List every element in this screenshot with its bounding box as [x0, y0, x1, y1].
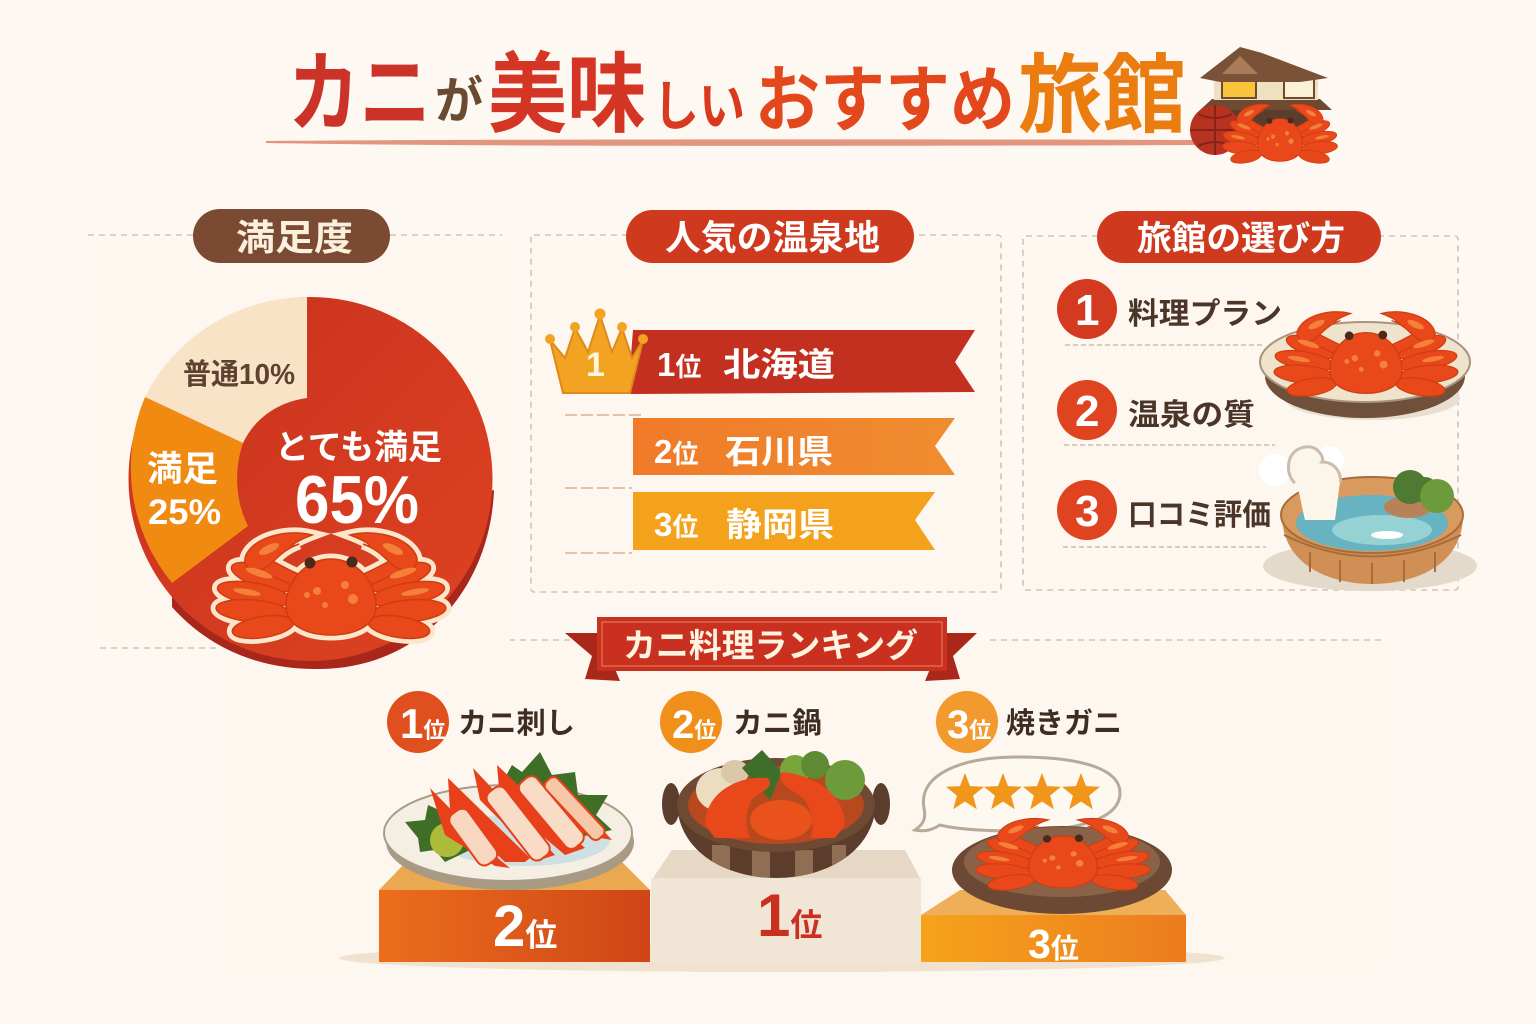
- ribbon: rank 1: 1位: [657, 346, 701, 383]
- icon: grilled crab plate: [952, 819, 1172, 914]
- heading: ranking banner: [565, 617, 977, 681]
- ribbon: rank 3: 3位: [654, 506, 698, 543]
- dish label 1: kani sashimi: カニ刺し: [458, 707, 575, 740]
- panel: satisfaction: [88, 209, 510, 669]
- dish label 2: kani nabe: カニ鍋: [733, 707, 822, 740]
- ribbon: rank 2: 2位: [654, 433, 698, 470]
- podium: first place block: 1位: [757, 882, 822, 949]
- ribbon: rank 2: [633, 418, 955, 475]
- panel: crab dish ranking: [339, 617, 1381, 972]
- label: very satisfied 65%: [275, 429, 442, 538]
- icon: crown: 1: [586, 346, 605, 384]
- ribbon: rank 3: 静岡県: [726, 506, 834, 543]
- dish label 3: grilled crab: 3位: [947, 703, 991, 747]
- heading: ranking banner: カニ料理ランキング: [623, 627, 918, 664]
- item 2: onsen quality: 温泉の質: [1128, 399, 1255, 432]
- dish label 2: kani nabe: 2位: [672, 703, 716, 747]
- icon: sashimi plate: [384, 752, 634, 890]
- label: very satisfied 65%: 65%: [295, 462, 419, 538]
- dish label 3: grilled crab: [936, 691, 1122, 753]
- callout: star rating bubble: [915, 757, 1120, 831]
- dish label 2: kani nabe: [660, 691, 822, 753]
- label: satisfied 25%: 25%: [148, 493, 221, 532]
- ribbon: rank 1: [628, 330, 975, 394]
- title: 美味: [488, 45, 646, 144]
- item 3: reviews: [1057, 480, 1271, 540]
- label: very satisfied 65%: とても満足: [275, 429, 442, 467]
- icon: red ball: [1190, 105, 1240, 155]
- podium base shadow: [339, 944, 1225, 972]
- title: [288, 44, 1186, 144]
- icon: crab on pie: [215, 533, 447, 642]
- pot vegetables: [696, 750, 865, 812]
- title underline: [266, 139, 1205, 146]
- dish label 3: grilled crab: 焼きガニ: [1006, 707, 1122, 740]
- pie chart: [128, 297, 494, 669]
- ribbon: rank 2: 石川県: [725, 433, 833, 470]
- item 3: reviews: 口コミ評価: [1128, 499, 1271, 532]
- icon: rocks and shrub: [1384, 470, 1454, 518]
- item 1: cuisine plan: 1: [1075, 286, 1099, 335]
- podium: third place block: 3位: [1028, 921, 1079, 967]
- title: しい: [653, 77, 745, 137]
- stars: [946, 773, 1100, 809]
- ribbon: rank 1: 北海道: [723, 346, 835, 383]
- item 1: cuisine plan: 料理プラン: [1128, 298, 1282, 331]
- title: 旅館: [1018, 48, 1186, 144]
- icon: hot spring tub: [1259, 446, 1477, 591]
- icon: small crab: [1222, 104, 1338, 165]
- title: おすすめ: [755, 61, 1015, 141]
- heading: choose pill: [1097, 211, 1381, 263]
- item 3: reviews: 3: [1075, 487, 1099, 536]
- ribbon: rank 3: [633, 492, 935, 550]
- podium: third place block: [921, 890, 1186, 967]
- heading: satisfaction pill: 満足度: [236, 217, 353, 258]
- item 1: cuisine plan: [1057, 279, 1282, 339]
- heading: onsen pill: 人気の温泉地: [665, 219, 880, 258]
- title: が: [435, 73, 483, 129]
- item 2: onsen quality: [1057, 380, 1255, 440]
- title: カニ: [288, 44, 431, 143]
- label: satisfied 25%: 満足: [147, 450, 218, 489]
- heading: onsen pill: [626, 210, 914, 263]
- panel: popular onsen: [531, 210, 1001, 592]
- heading: satisfaction pill: [193, 209, 390, 263]
- label: normal 10%: 普通10%: [183, 358, 295, 391]
- icon: ryokan building with crab: [1190, 47, 1338, 165]
- icon: crab hot pot: [662, 750, 890, 890]
- podium: first place block: [651, 850, 921, 962]
- item 2: onsen quality: 2: [1075, 387, 1099, 436]
- dish label 1: kani sashimi: [387, 691, 575, 753]
- podium: second place block: 2位: [493, 894, 557, 959]
- dish label 1: kani sashimi: 1位: [400, 700, 445, 747]
- podium: second place block: [379, 860, 650, 962]
- icon: crown: [545, 308, 648, 393]
- icon: crab on plate: [1260, 312, 1470, 420]
- panel: how to choose ryokan: [1023, 211, 1477, 591]
- label: satisfied 25%: [147, 450, 221, 532]
- icon: steam: [1259, 446, 1344, 520]
- heading: choose pill: 旅館の選び方: [1137, 220, 1345, 258]
